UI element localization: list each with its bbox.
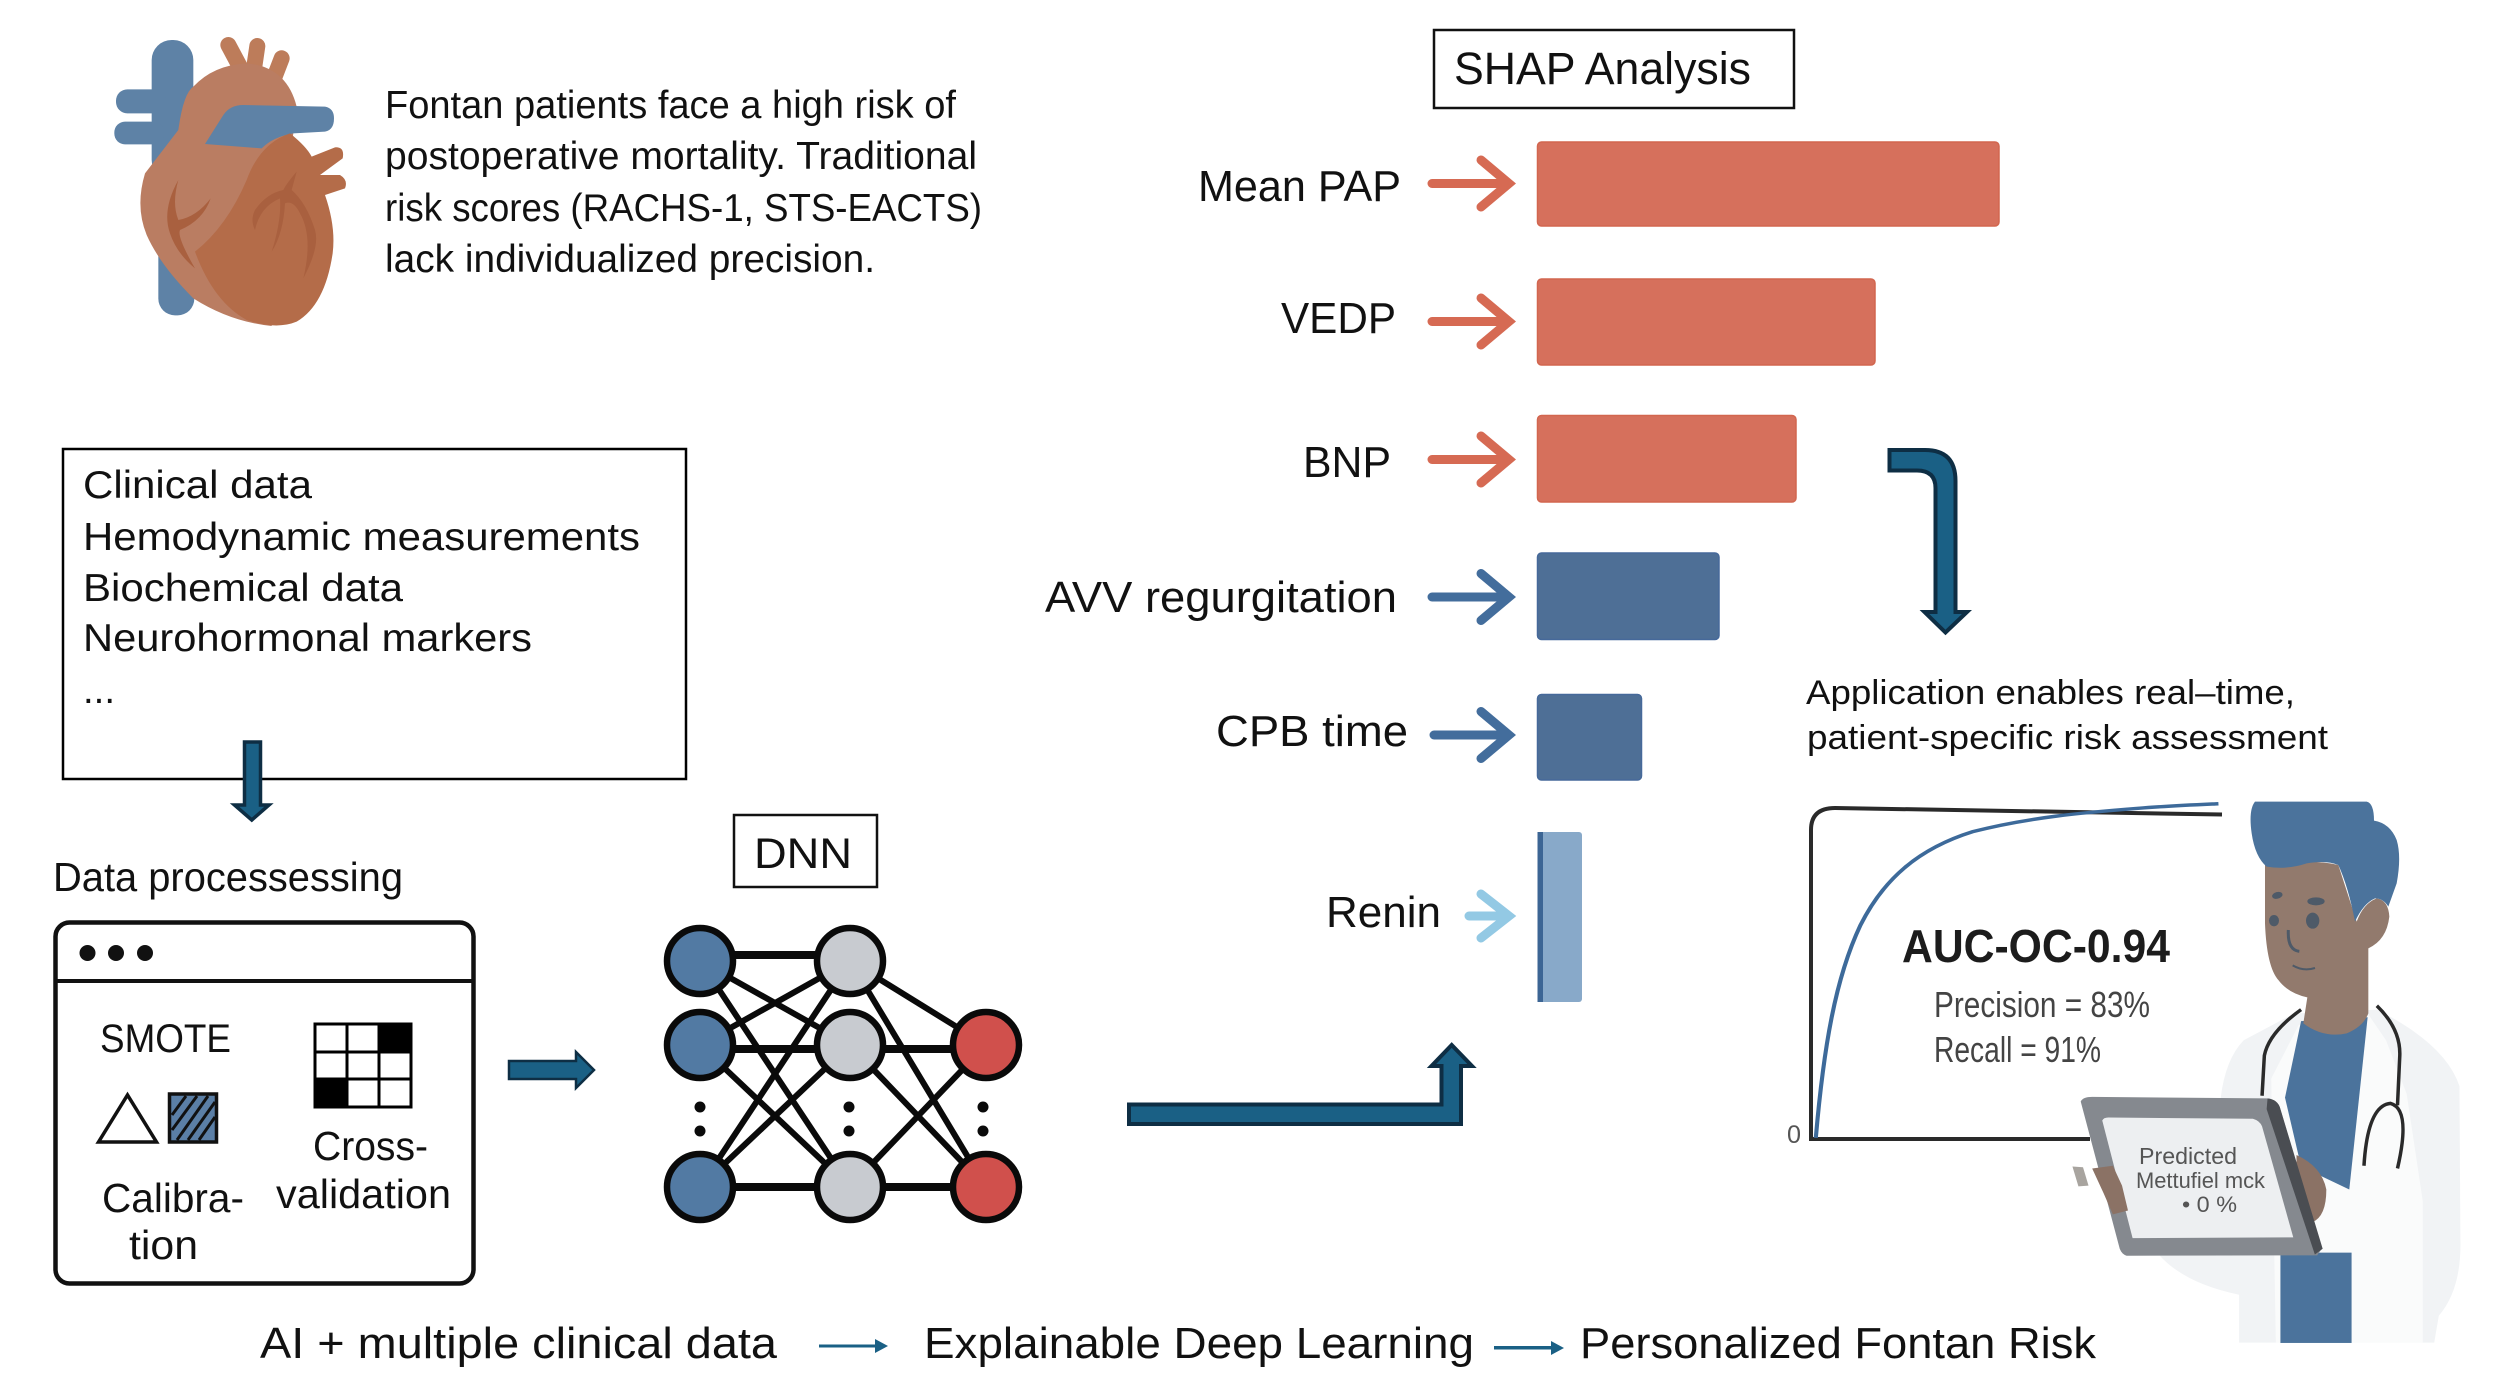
row: AVV regurgitation: AVV regurgitation xyxy=(1045,573,1397,622)
text: introduction: risk scores (RACHS-1, STS-EACTS) xyxy=(385,187,982,230)
chart: SHAP feature importance xyxy=(1045,142,1999,1002)
row: CPB time xyxy=(1216,694,1642,780)
label box: SHAP Analysis xyxy=(1434,30,1794,108)
icon: triangle xyxy=(98,1095,156,1142)
arrow: network to SHAP xyxy=(1129,1045,1472,1124)
text: introduction xyxy=(385,84,982,281)
label: calibration xyxy=(102,1175,244,1268)
panel: input data box: Neurohormonal markers xyxy=(83,617,532,660)
row: Renin: Renin xyxy=(1326,888,1441,937)
label: calibration: tion xyxy=(129,1222,198,1268)
illustration: doctor with tablet xyxy=(2072,802,2460,1343)
heading: data processing: Data processessing xyxy=(53,854,403,900)
arrow: input data to processing xyxy=(234,742,269,820)
arrow: SHAP to application xyxy=(1890,450,1967,632)
text: introduction: Fontan patients face a high risk of xyxy=(385,84,956,127)
doctor coat xyxy=(2072,1006,2460,1343)
row: CPB time: CPB time xyxy=(1216,707,1408,756)
left hand xyxy=(2092,1166,2128,1214)
text: introduction: postoperative mortality. Traditional xyxy=(385,135,977,178)
summary: bottom takeaway: Explainable Deep Learning xyxy=(924,1319,1474,1368)
arrow: explainable to personalized xyxy=(1494,1341,1564,1355)
row: AVV regurgitation xyxy=(1045,553,1719,640)
summary: bottom takeaway xyxy=(260,1319,2097,1368)
row: VEDP xyxy=(1281,279,1875,365)
label: calibration: Calibra- xyxy=(102,1175,244,1221)
icon: heart xyxy=(114,40,346,326)
panel: data processing window xyxy=(55,922,474,1284)
tablet text xyxy=(2136,1143,2266,1217)
text: application note xyxy=(1806,674,2329,757)
chart: neural network diagram xyxy=(667,928,1019,1220)
metric: precision: Precision = 83% xyxy=(1934,984,2150,1025)
tablet text: Predicted xyxy=(2139,1143,2237,1169)
text: application note: Application enables real–time, xyxy=(1806,674,2295,712)
row: Renin xyxy=(1326,832,1582,1002)
tablet text: Mettufiel mck xyxy=(2136,1168,2266,1193)
arrow: processing to network xyxy=(509,1052,594,1088)
label box: DNN: DNN xyxy=(754,830,852,878)
arrow: AI to explainable xyxy=(819,1339,888,1353)
doctor head xyxy=(2251,802,2399,1035)
summary: bottom takeaway: Personalized Fontan Risk xyxy=(1580,1319,2097,1368)
chart: ROC curve: 0 xyxy=(1787,1121,1801,1149)
icon: hatched square xyxy=(170,1094,216,1142)
text: application note: patient-specific risk assessment xyxy=(1807,719,2329,757)
panel: input data box: Biochemical data xyxy=(83,567,403,610)
panel: input data box: Hemodynamic measurements xyxy=(83,516,640,559)
panel: input data box xyxy=(63,449,686,779)
row: Mean PAP: Mean PAP xyxy=(1198,162,1401,211)
panel: input data box: Clinical data xyxy=(83,464,312,507)
label: cross-validation xyxy=(276,1123,451,1217)
right hand xyxy=(2296,1155,2326,1222)
row: Mean PAP xyxy=(1198,142,1999,226)
panel: input data box: ... xyxy=(83,669,115,712)
tablet text: • 0 % xyxy=(2182,1192,2237,1217)
icon: cross-validation grid xyxy=(315,1024,411,1107)
text: introduction: lack individualized precision. xyxy=(385,238,875,281)
row: VEDP: VEDP xyxy=(1281,294,1396,343)
label box: DNN xyxy=(734,815,877,887)
summary: bottom takeaway: AI + multiple clinical data xyxy=(260,1319,778,1368)
shirt xyxy=(2285,1017,2368,1189)
tablet xyxy=(2081,1097,2322,1256)
row: BNP: BNP xyxy=(1303,438,1391,487)
row: BNP xyxy=(1303,416,1796,502)
label box: SHAP Analysis: SHAP Analysis xyxy=(1454,43,1751,94)
label: cross-validation: Cross- xyxy=(313,1123,428,1169)
label: cross-validation: validation xyxy=(276,1171,451,1217)
chart: ROC curve xyxy=(1787,804,2222,1149)
label: SMOTE: SMOTE xyxy=(100,1017,231,1061)
stethoscope xyxy=(2262,1006,2403,1168)
metric: AUC: AUC-OC-0.94 xyxy=(1902,920,2170,972)
metric: recall: Recall = 91% xyxy=(1934,1029,2101,1070)
